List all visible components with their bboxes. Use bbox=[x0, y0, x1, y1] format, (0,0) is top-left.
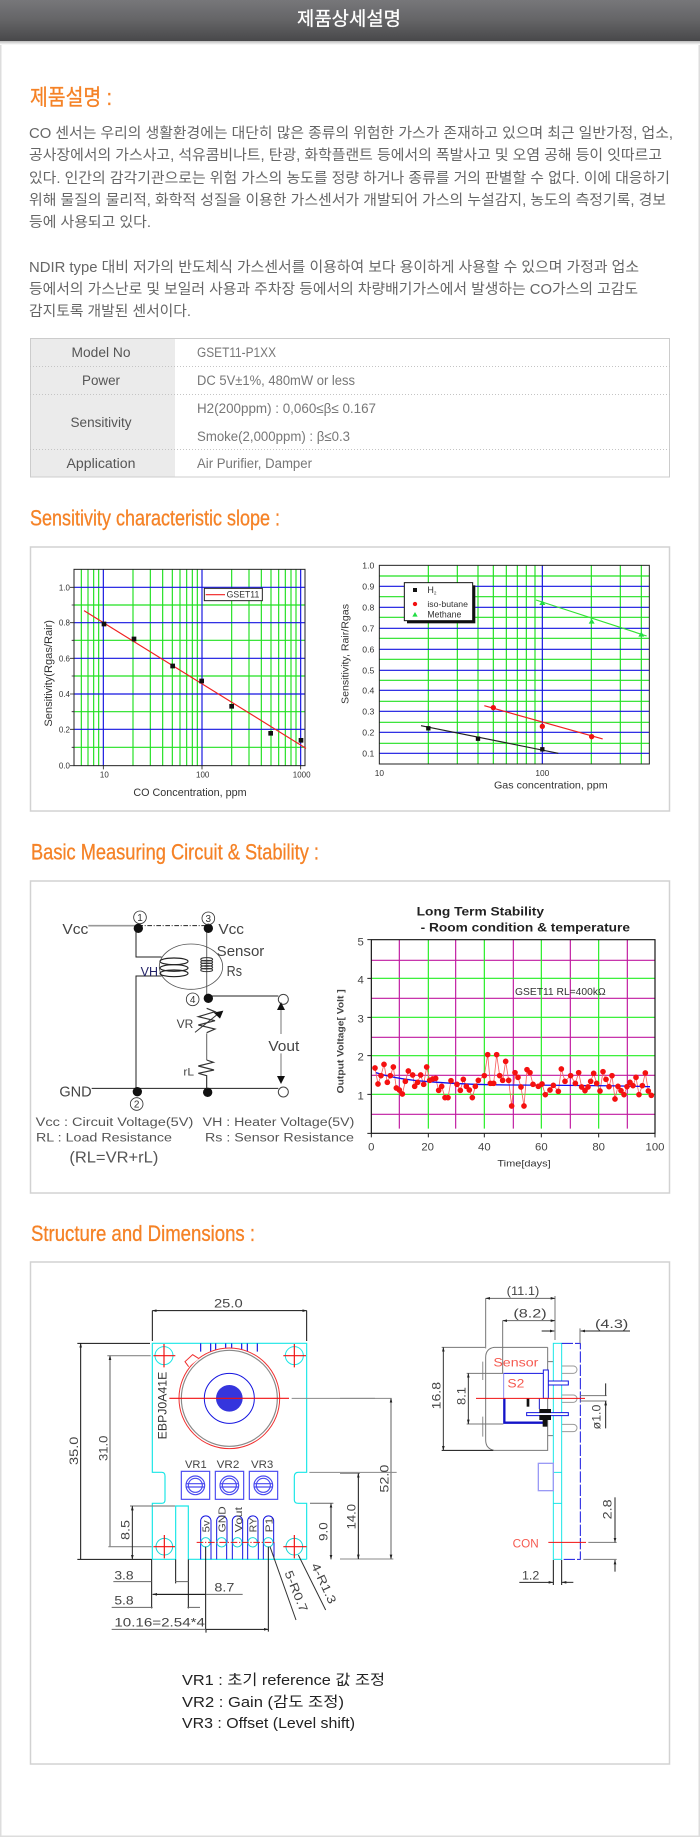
dimension lines: 52.0 and 14.0: 14.0 bbox=[344, 1504, 358, 1529]
drawing: top view upper part: VR2 bbox=[217, 1459, 239, 1471]
text block: VR legend: VR3 : Offset (Level shift) bbox=[182, 1716, 355, 1732]
drawing: top view connector and dimensions bbox=[77, 1503, 339, 1633]
circuit diagram: (RL=VR+rL) bbox=[69, 1150, 158, 1167]
specification table: Sensitivity bbox=[70, 415, 132, 430]
circuit diagram: Rs : Sensor Resistance bbox=[205, 1131, 354, 1145]
chart: gas concentration sensitivity: 100 bbox=[535, 768, 550, 778]
chart: gas concentration sensitivity: 0.7 bbox=[362, 623, 375, 633]
heading: circuit: Basic Measuring Circuit & Stability : bbox=[31, 840, 319, 864]
drawing: side view: ø1.0 bbox=[590, 1404, 604, 1429]
chart: gas concentration sensitivity: 1.0 bbox=[362, 560, 375, 570]
chart: CO concentration sensitivity: 0.6 bbox=[59, 654, 71, 663]
drawing: top view connector and dimensions: 8.5 bbox=[118, 1520, 132, 1540]
chart: long term stability: 100 bbox=[646, 1142, 664, 1154]
drawing: side view: S2 bbox=[507, 1377, 525, 1391]
chart: gas concentration sensitivity: 10 bbox=[375, 768, 384, 778]
specification table: Application bbox=[66, 456, 136, 471]
circuit diagram: Vcc bbox=[62, 922, 88, 938]
chart: CO concentration sensitivity: 0.4 bbox=[59, 690, 71, 699]
drawing: top view connector and dimensions: 9.0 bbox=[316, 1522, 330, 1541]
chart: long term stability: 0 bbox=[368, 1142, 374, 1154]
chart: gas concentration sensitivity: 0.2 bbox=[362, 727, 375, 737]
circuit diagram: 3 bbox=[206, 914, 212, 925]
chart: long term stability: 5 bbox=[358, 937, 364, 949]
chart: gas concentration sensitivity: Sensitivity, Rair/Rgas bbox=[341, 604, 352, 704]
chart: gas concentration sensitivity: 0.6 bbox=[362, 644, 375, 654]
chart: gas concentration sensitivity: 0.3 bbox=[362, 706, 375, 716]
drawing: side view: 2.8 bbox=[600, 1499, 614, 1519]
chart: gas concentration sensitivity: 0.8 bbox=[362, 602, 375, 612]
circuit diagram bbox=[36, 911, 354, 1167]
header bar bbox=[0, 0, 700, 45]
chart: gas concentration sensitivity: iso-butane bbox=[427, 599, 468, 609]
chart: gas concentration sensitivity bbox=[341, 560, 649, 792]
circuit diagram: Vout bbox=[268, 1039, 299, 1055]
drawing: top view connector and dimensions: Vout bbox=[234, 1507, 245, 1532]
panel: circuit and stability bbox=[30, 881, 670, 1193]
specification table bbox=[30, 338, 670, 477]
chart: CO concentration sensitivity: GSET11 bbox=[227, 590, 259, 600]
drawing: side view: 1.2 bbox=[522, 1569, 540, 1583]
chart: CO concentration sensitivity: 1.0 bbox=[59, 583, 71, 592]
specification table: Smoke(2,000ppm) : β≤0.3 bbox=[197, 429, 350, 444]
chart: gas concentration sensitivity: 0.1 bbox=[362, 748, 375, 758]
panel: structure and dimensions bbox=[30, 1262, 670, 1764]
chart: long term stability: 60 bbox=[535, 1142, 548, 1154]
text block: description: 감지토록 개발된 센서이다. bbox=[29, 303, 191, 320]
chart: long term stability: GSET11 RL=400kΩ bbox=[515, 987, 606, 998]
circuit diagram: rL bbox=[183, 1066, 194, 1078]
panel: sensitivity charts bbox=[30, 547, 670, 811]
drawing: top view connector and dimensions: RY bbox=[249, 1518, 260, 1532]
circuit diagram: Rs bbox=[227, 964, 242, 980]
drawing: side view: (4.3) bbox=[595, 1317, 628, 1331]
drawing: top view connector and dimensions: P1 bbox=[264, 1517, 275, 1532]
chart: CO concentration sensitivity: Sensitivity(Rgas/Rair) bbox=[43, 620, 55, 727]
chart: CO concentration sensitivity: 1000 bbox=[293, 771, 311, 780]
drawing: top view connector and dimensions: 5.8 bbox=[114, 1594, 134, 1608]
chart: long term stability: 3 bbox=[358, 1013, 364, 1025]
chart: long term stability bbox=[335, 905, 664, 1169]
specification table: Air Purifier, Damper bbox=[197, 456, 312, 471]
chart: gas concentration sensitivity: Methane bbox=[427, 610, 461, 620]
chart: long term stability: 4 bbox=[358, 974, 364, 986]
text block: description: 등에서의 가스난로 및 보일러 사용과 주차장 등에서의 차량배기가스에서 발생하는 CO가스의 고감도 bbox=[29, 281, 638, 298]
text block: VR legend bbox=[182, 1672, 385, 1732]
text block: description bbox=[29, 125, 673, 320]
text block: description: 위해 물질의 물리적, 화학적 성질을 이용한 가스센서가 개발되어 가스의 누설감지, 농도의 측정기록, 경보 bbox=[29, 192, 666, 209]
chart: gas concentration sensitivity: 2 bbox=[434, 591, 437, 596]
circuit diagram: Vcc : Circuit Voltage(5V) bbox=[36, 1115, 193, 1129]
drawing: top view upper part: EBPJ0A41E bbox=[157, 1371, 170, 1439]
chart: gas concentration sensitivity: 0.9 bbox=[362, 581, 375, 591]
heading: product description: 제품설명 : bbox=[30, 85, 112, 110]
text block: VR legend: VR2 : Gain (감도 조정) bbox=[182, 1694, 344, 1711]
specification table: Power bbox=[82, 373, 121, 388]
chart: CO concentration sensitivity bbox=[43, 569, 311, 799]
drawing: top view upper part: 35.0 bbox=[67, 1436, 81, 1465]
drawing: top view connector and dimensions: GND bbox=[218, 1506, 229, 1532]
dimension lines: 52.0 and 14.0 bbox=[340, 1398, 393, 1559]
drawing: top view connector and dimensions: 3.8 bbox=[114, 1568, 134, 1582]
heading: sensitivity: Sensitivity characteristic slope : bbox=[30, 506, 280, 530]
drawing: top view upper part bbox=[67, 1297, 397, 1559]
chart: CO concentration sensitivity: 0.2 bbox=[59, 725, 71, 734]
circuit diagram: Vcc bbox=[218, 922, 244, 938]
text block: description: 공사장에서의 가스사고, 석유콤비나트, 탄광, 화학플랜트 등에서의 폭발사고 및 오염 공해 등이 잇따르고 bbox=[29, 147, 662, 164]
text block: description: 등에 사용되고 있다. bbox=[29, 214, 151, 231]
chart: CO concentration sensitivity: CO Concentration, ppm bbox=[133, 787, 247, 799]
chart: long term stability: 40 bbox=[478, 1142, 491, 1154]
circuit diagram: 2 bbox=[134, 1100, 140, 1111]
chart: gas concentration sensitivity: H bbox=[427, 585, 434, 595]
circuit diagram: 1 bbox=[137, 913, 143, 924]
drawing: top view connector and dimensions: 10.16=2.54*4 bbox=[114, 1615, 205, 1629]
drawing: top view connector and dimensions: 4-R1.3 bbox=[308, 1561, 339, 1606]
drawing: side view: (11.1) bbox=[507, 1284, 539, 1298]
chart: long term stability: 80 bbox=[592, 1142, 605, 1154]
specification table: GSET11-P1XX bbox=[197, 345, 276, 360]
chart: CO concentration sensitivity: 0.8 bbox=[59, 619, 71, 628]
chart: long term stability: Output Voltage[ Volt ] bbox=[335, 989, 345, 1093]
chart: CO concentration sensitivity: 100 bbox=[196, 771, 210, 780]
chart: gas concentration sensitivity: 0.4 bbox=[362, 685, 375, 695]
drawing: side view: 16.8 bbox=[430, 1382, 444, 1409]
circuit diagram: VR bbox=[177, 1017, 194, 1031]
circuit diagram: GND bbox=[59, 1085, 92, 1101]
chart: long term stability: Long Term Stability bbox=[417, 905, 544, 919]
drawing: side view bbox=[430, 1284, 630, 1585]
drawing: top view upper part: 25.0 bbox=[214, 1297, 243, 1311]
heading: structure: Structure and Dimensions : bbox=[31, 1221, 255, 1246]
chart: long term stability: Time[days] bbox=[497, 1159, 551, 1169]
circuit diagram: VH : Heater Voltage(5V) bbox=[203, 1115, 354, 1129]
drawing: top view connector and dimensions: 8.7 bbox=[214, 1581, 235, 1595]
drawing: top view upper part: 31.0 bbox=[96, 1435, 110, 1461]
text block: description: 있다. 인간의 감각기관으로는 위험 가스의 농도를 정량 하거나 종류를 거의 판별할 수 없다. 이에 대응하기 bbox=[29, 170, 670, 187]
drawing: top view connector and dimensions: 5-R0.7 bbox=[282, 1569, 311, 1614]
drawing: side view: CON bbox=[513, 1537, 539, 1551]
chart: long term stability: - Room condition & temperature bbox=[421, 921, 630, 935]
circuit diagram: RL : Load Resistance bbox=[36, 1131, 172, 1145]
specification table: DC 5V±1%, 480mW or less bbox=[197, 373, 355, 388]
chart: CO concentration sensitivity: 0.0 bbox=[59, 762, 71, 771]
circuit diagram: 4 bbox=[190, 995, 196, 1006]
chart: long term stability: 2 bbox=[358, 1052, 364, 1064]
drawing: side view: 8.1 bbox=[455, 1387, 469, 1405]
specification table: H2(200ppm) : 0,060≤β≤ 0.167 bbox=[197, 401, 376, 416]
chart: long term stability: 1 bbox=[358, 1090, 364, 1102]
text block: VR legend: VR1 : 초기 reference 값 조정 bbox=[182, 1672, 385, 1689]
drawing: top view upper part: VR3 bbox=[251, 1459, 273, 1471]
chart: long term stability: 20 bbox=[421, 1142, 434, 1154]
chart: CO concentration sensitivity: 10 bbox=[100, 771, 109, 780]
drawing: side view: (8.2) bbox=[513, 1306, 547, 1320]
circuit diagram: VH bbox=[141, 965, 158, 979]
circuit diagram: Sensor bbox=[217, 944, 265, 960]
text block: description: CO 센서는 우리의 생활환경에는 대단히 많은 종류의 위험한 가스가 존재하고 있으며 최근 일반가정, 업소, bbox=[29, 125, 673, 142]
header bar: 제품상세설명 bbox=[297, 8, 401, 30]
drawing: top view connector and dimensions: 5v bbox=[202, 1519, 213, 1532]
chart: gas concentration sensitivity: Gas concentration, ppm bbox=[494, 781, 608, 792]
drawing: side view: Sensor bbox=[493, 1356, 538, 1370]
chart: gas concentration sensitivity: 0.5 bbox=[362, 665, 375, 675]
drawing: top view upper part: VR1 bbox=[185, 1459, 207, 1471]
text block: description: NDIR type 대비 저가의 반도체식 가스센서를 이용하여 보다 용이하게 사용할 수 있으며 가정과 업소 bbox=[29, 259, 639, 276]
specification table: Model No bbox=[72, 345, 130, 360]
dimension lines: 52.0 and 14.0: 52.0 bbox=[377, 1464, 391, 1493]
